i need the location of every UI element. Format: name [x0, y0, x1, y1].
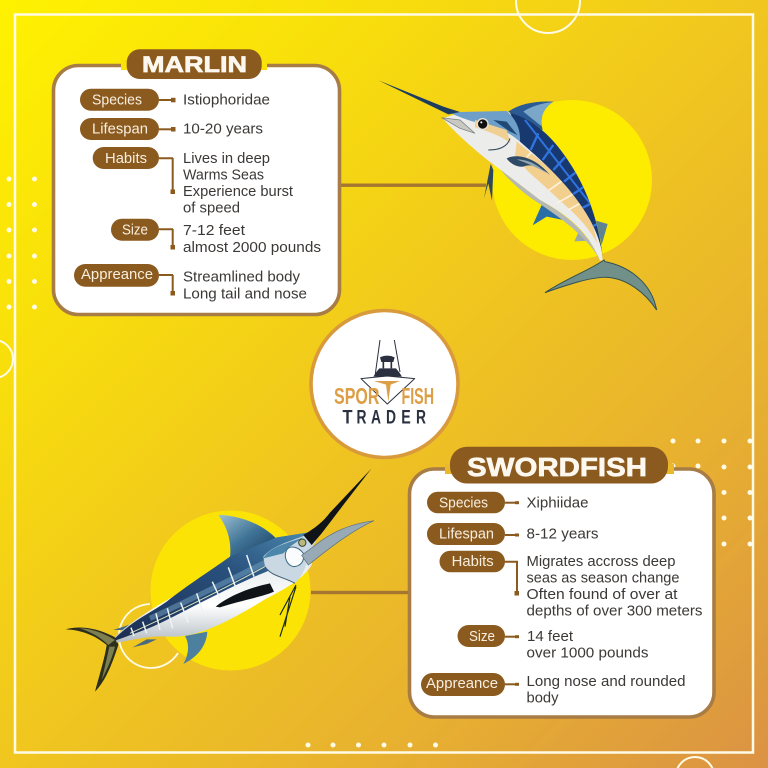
row: habits: Migrates accross deep [526, 554, 676, 570]
swordfish title [445, 447, 674, 484]
row: lifespan: 8-12 years [526, 527, 598, 543]
row: appearance: Long tail and nose [183, 286, 307, 302]
logo text: TRADER: E [401, 408, 411, 429]
row: appearance [421, 673, 686, 707]
yellow circle behind swordfish [150, 510, 310, 670]
body upper [115, 532, 313, 641]
logo: Sport Fish Trader [311, 310, 458, 458]
row: species: Istiophoridae [183, 92, 270, 108]
row: appearance: Streamlined body [183, 270, 301, 286]
logo text: TRADER: A [371, 408, 381, 429]
swordfish title: SWORDFISH [467, 452, 647, 482]
row: size: 7-12 feet [183, 223, 245, 239]
logo circle [311, 310, 458, 458]
row: lifespan: 10-20 years [183, 122, 263, 138]
body [443, 112, 603, 261]
body lower [115, 550, 313, 643]
row: size: over 1000 pounds [526, 646, 648, 662]
gill line [265, 567, 295, 583]
ventral fins [484, 164, 493, 201]
gill line [488, 138, 510, 150]
marlin title [121, 49, 267, 79]
tail fin [66, 627, 118, 692]
logo text: TRADER [342, 408, 426, 429]
marlin title: MARLIN [142, 52, 247, 77]
row: size: Size [122, 223, 148, 239]
row: appearance [74, 264, 307, 302]
tan flank bars [515, 142, 597, 243]
row: lifespan [80, 118, 263, 140]
row: appearance: Long nose and rounded [526, 674, 686, 690]
illustration: marlin fish [378, 80, 657, 310]
row: species: Xiphiidae [526, 496, 588, 512]
lower jaw [442, 118, 475, 133]
row: habits [440, 551, 702, 619]
row: habits: depths of over 300 meters [526, 603, 702, 619]
logo text: FISH: FISH [402, 383, 434, 409]
anal fin [183, 632, 207, 664]
dorsal fin [508, 101, 553, 130]
row: habits: Experience burst [183, 184, 293, 200]
bill [378, 80, 460, 114]
anal fin [533, 205, 563, 225]
row: appearance: Appreance [81, 267, 153, 283]
dorsal fin [218, 515, 276, 557]
second dorsal fin [596, 221, 608, 245]
row: species: Species [439, 496, 488, 512]
logo text: TRADER: T [342, 408, 353, 429]
row: size [111, 219, 321, 256]
connector: marlin panel to fish [340, 184, 486, 187]
row: lifespan [427, 523, 598, 545]
cheek [285, 547, 304, 567]
row: appearance: body [526, 691, 559, 707]
bill [303, 468, 372, 545]
row: size: Size [469, 629, 495, 645]
head top [263, 537, 303, 558]
row: species [427, 492, 588, 513]
small fins [113, 623, 157, 647]
lateral line [130, 558, 280, 633]
row: size [458, 625, 648, 662]
head dark patch [493, 120, 517, 135]
row: habits: Warms Seas [183, 168, 264, 184]
panel: marlin [54, 49, 340, 315]
marlin panel box [54, 66, 340, 314]
logo text: SPOR: SPOR [334, 383, 380, 409]
panel: swordfish [410, 447, 714, 717]
pectoral fin [507, 156, 550, 175]
flank highlight [150, 560, 270, 618]
belly shadow [500, 169, 600, 261]
row: habits: of speed [183, 200, 240, 216]
row: habits: Habits [105, 151, 147, 167]
bright blue stripes [525, 120, 601, 227]
row: habits: Lives in deep [183, 151, 270, 167]
eye [299, 539, 306, 546]
row: habits: Often found of over at [526, 587, 678, 603]
row: size: almost 2000 pounds [183, 240, 321, 256]
row: species [80, 89, 270, 111]
logo text: TRADER: R [356, 408, 367, 429]
white body stripes [131, 555, 254, 636]
row: species: Species [92, 92, 142, 108]
row: habits: seas as season change [526, 571, 680, 587]
tan cheek [475, 120, 511, 143]
row: habits [93, 147, 293, 216]
eye [477, 118, 489, 130]
connector: swordfish panel to fish [311, 591, 410, 594]
logo boat icon [361, 340, 415, 404]
row: habits: Habits [452, 554, 494, 570]
row: lifespan: Lifespan [439, 527, 494, 543]
cream flank marks [527, 150, 580, 210]
blue back [510, 113, 603, 260]
row: lifespan: Lifespan [92, 122, 148, 138]
ventral filaments [280, 585, 296, 637]
pectoral fin [216, 583, 274, 607]
tail fin [545, 260, 657, 310]
illustration: swordfish [66, 468, 374, 692]
head [263, 533, 317, 583]
small lower fin [574, 233, 590, 241]
decorative dots [6, 176, 752, 748]
row: appearance: Appreance [426, 676, 498, 692]
logo text: TRADER: D [386, 408, 396, 429]
lower jaw [302, 521, 374, 565]
head top [443, 109, 520, 142]
row: size: 14 feet [527, 629, 573, 645]
logo text: TRADER: R [416, 408, 426, 429]
yellow circle behind marlin [492, 100, 652, 260]
swordfish panel box [410, 469, 714, 717]
arc near swordfish tail [119, 604, 178, 668]
